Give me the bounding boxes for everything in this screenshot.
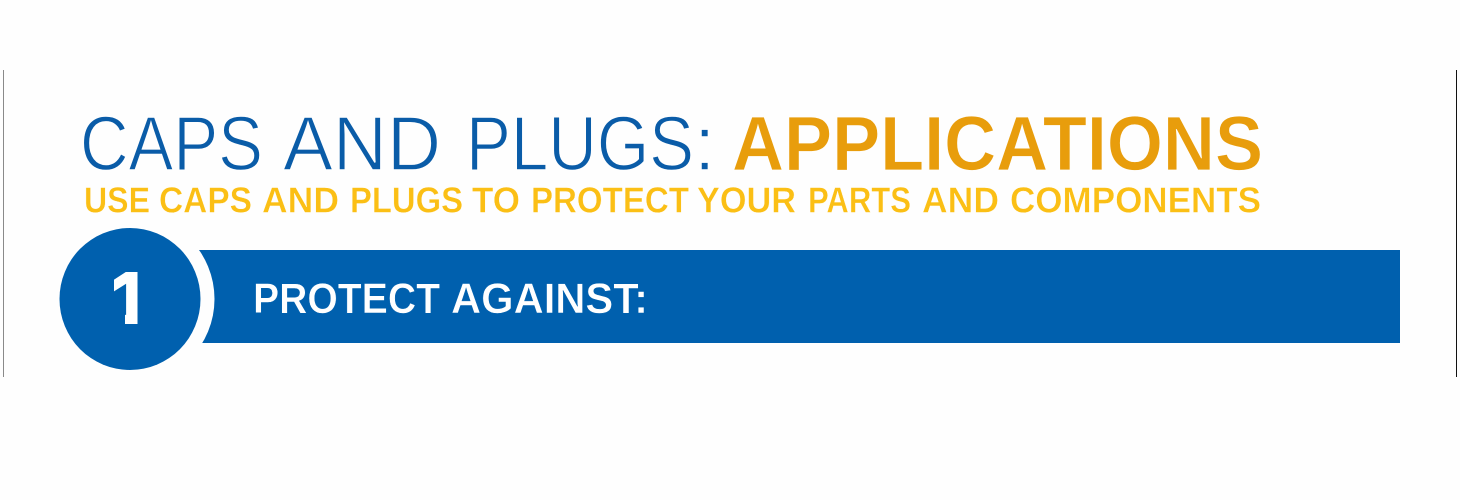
- subtitle: PROTECT: [531, 180, 689, 220]
- subtitle: COMPONENTS: [1010, 180, 1261, 220]
- section banner: [60, 228, 1400, 370]
- number badge circle: [60, 228, 200, 370]
- banner label: PROTECT: [253, 275, 440, 323]
- title: light blue part: AND: [283, 101, 441, 187]
- number 1: 1: [110, 256, 152, 340]
- title: light blue part: [80, 101, 715, 187]
- subtitle: AND: [922, 180, 999, 220]
- title: bold orange part: APPLICATIONS: [732, 101, 1263, 187]
- title: [80, 101, 1263, 187]
- subtitle: [84, 180, 1261, 220]
- subtitle: AND: [262, 180, 339, 220]
- title: light blue part: CAPS: [80, 101, 263, 187]
- banner label: [253, 275, 648, 323]
- left edge line: [3, 70, 4, 377]
- subtitle: PLUGS: [350, 180, 463, 220]
- subtitle: USE: [84, 180, 150, 220]
- title: light blue part: :: [694, 101, 715, 187]
- right edge line: [1456, 70, 1457, 377]
- subtitle: YOUR: [697, 180, 796, 220]
- subtitle: PARTS: [808, 180, 911, 220]
- white ring around number badge: [46, 214, 214, 384]
- infographic canvas: [3, 70, 1457, 377]
- title: light blue part: PLUGS: [466, 101, 694, 187]
- banner label: AGAINST:: [451, 275, 648, 323]
- subtitle: TO: [472, 180, 520, 220]
- banner bar: [130, 250, 1400, 343]
- subtitle: CAPS: [159, 180, 252, 220]
